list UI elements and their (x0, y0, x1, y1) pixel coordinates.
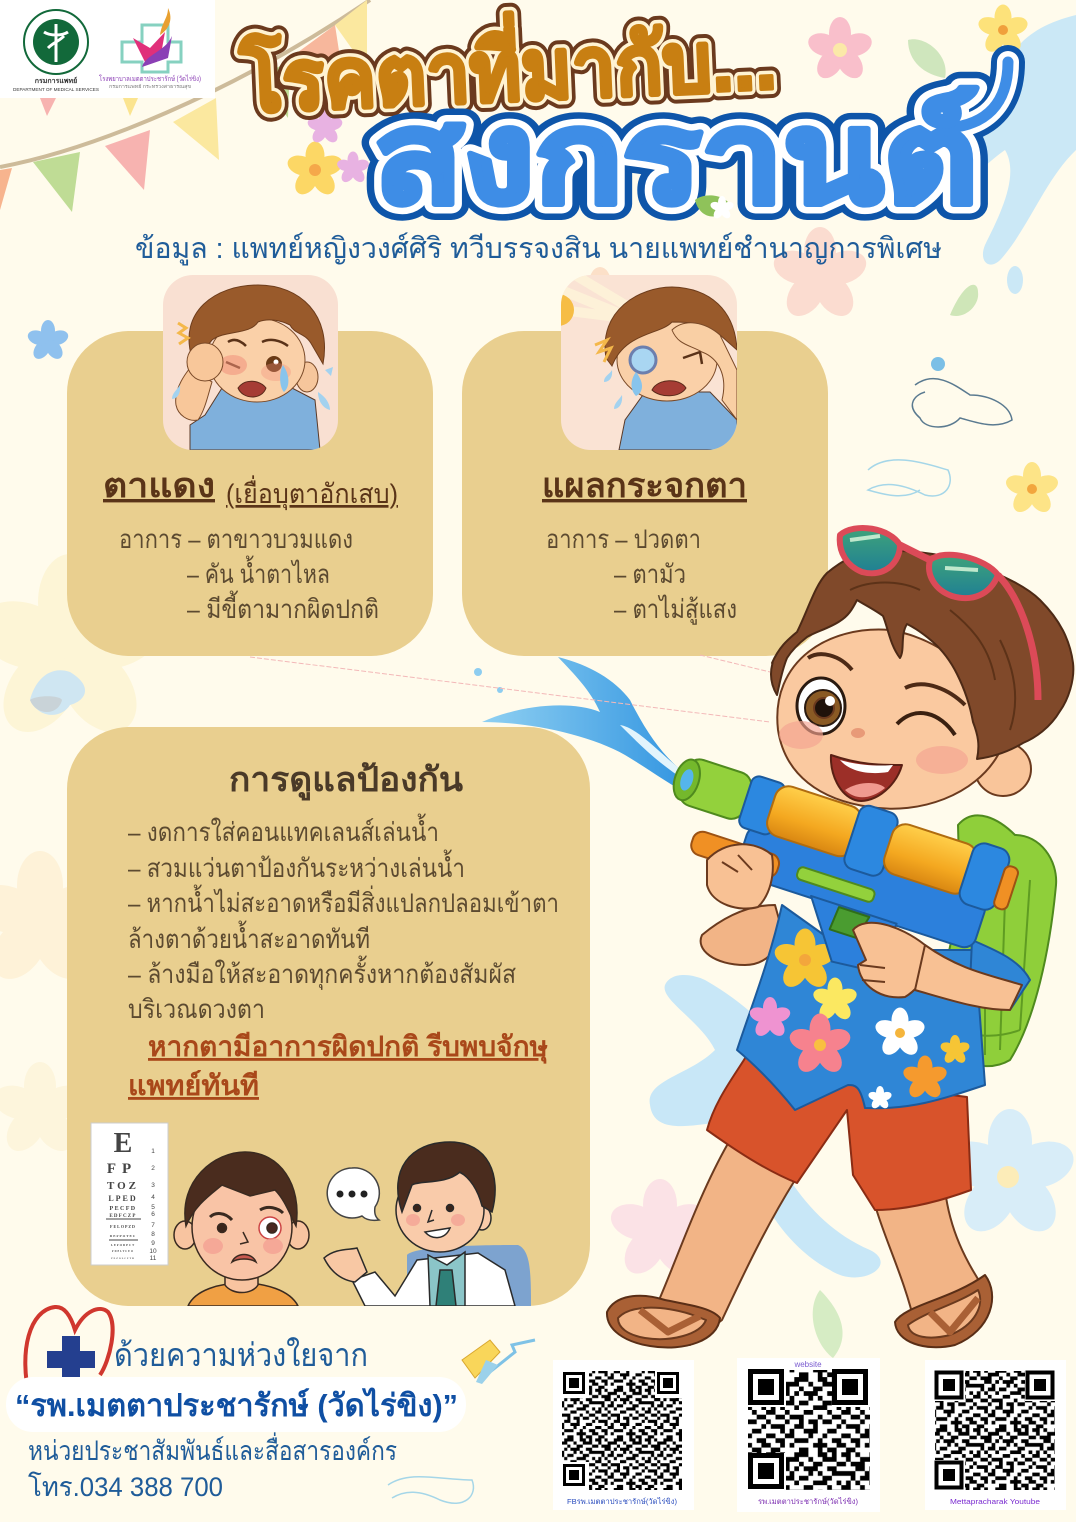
footer: hospital name (6, 1377, 466, 1432)
QR code: website (737, 1358, 880, 1512)
illustration: eye chart: TOZ (107, 1180, 139, 1192)
QR code: youtube (925, 1360, 1066, 1510)
illustration: eye chart: FELOPZD (110, 1224, 136, 1229)
advice list: – หากน้ำไม่สะอาดหรือมีสิ่งแปลกปลอมเข้าตา (128, 884, 559, 918)
title line 1: โรคตาที่มากับ... (237, 0, 778, 130)
QR code: website: รพ.เมตตาประชารักษ์(วัดไร่ขิง) (758, 1497, 858, 1506)
footer: unit name: หน่วยประชาสัมพันธ์และสื่อสารองค์กร (28, 1432, 397, 1466)
winking eye (897, 713, 955, 735)
symptom list: – ตาไม่สู้แสง (614, 594, 737, 625)
panel: care and prevention (67, 727, 590, 1306)
symptom list (546, 524, 737, 625)
illustration: eye chart: LEFODPCT (111, 1243, 135, 1247)
open eye (797, 678, 845, 734)
QR code: facebook: FBรพ.เมตตาประชารักษ์(วัดไร่ขิง) (567, 1497, 678, 1506)
illustration: eye chart: 6 (151, 1211, 155, 1218)
illustration: eye chart: 4 (151, 1194, 155, 1201)
illustration: eye chart: FDPLTCEO (112, 1250, 134, 1253)
illustration: eye chart (91, 1123, 168, 1265)
backpack (900, 815, 1056, 1066)
decoration: water wave doodles (388, 357, 1012, 1503)
title line 1: โรคตาที่มากับ... (237, 0, 778, 130)
illustration: eye chart: 7 (151, 1222, 155, 1229)
illustration: eye chart: 3 (151, 1182, 155, 1189)
advice list: ล้างตาด้วยน้ำสะอาดทันที (128, 920, 370, 954)
logo: hospital: โรงพยาบาลเมตตาประชารักษ์ (วัดไร่ขิง) (99, 74, 201, 83)
character: boy with water gun (607, 528, 1073, 1348)
panel: corneal ulcer (462, 275, 828, 656)
advice list: – สวมแว่นตาป้องกันระหว่างเล่นน้ำ (128, 849, 465, 883)
footer: phone: โทร.034 388 700 (28, 1472, 223, 1502)
footer: hospital logo (25, 1307, 113, 1400)
title line 2: สงกรานต์ (374, 87, 978, 230)
illustration: eye chart: 9 (151, 1240, 155, 1247)
advice list: บริเวณดวงตา (128, 994, 265, 1024)
illustration: eye chart: FP (107, 1161, 137, 1177)
illustration: eye chart: 11 (150, 1255, 157, 1262)
symptom list: – คัน น้ำตาไหล (187, 555, 330, 589)
footer: concern text: ด้วยความห่วงใยจาก (114, 1337, 368, 1373)
speech bubble (327, 1168, 379, 1220)
faint red laser lines (250, 655, 770, 722)
arms back (701, 905, 782, 965)
title line 2: สงกรานต์ (374, 87, 978, 230)
panel: conjunctivitis (67, 275, 433, 656)
footer: hospital name: “รพ.เมตตาประชารักษ์ (วัดไร่ขิง)” (15, 1387, 458, 1423)
decoration: leaf on title (695, 195, 735, 220)
logos block (0, 0, 215, 98)
legs (650, 1140, 985, 1345)
symptom list: อาการ – ตาขาวบวมแดง (119, 524, 353, 554)
title line 1: โรคตาที่มากับ... (237, 0, 778, 130)
background: water splash behind boy (650, 975, 881, 1277)
illustration: eye chart: E (114, 1128, 132, 1159)
subtitle: data source: ข้อมูล : แพทย์หญิงวงศ์ศิริ ทวีบรรจงสิน นายแพทย์ชำนาญการพิเศษ (135, 232, 942, 266)
sub heading: (เยื่อบุตาอักเสบ) (226, 475, 398, 511)
logo: department of medical services (13, 10, 99, 92)
illustration: eye chart: PECFD (110, 1206, 136, 1212)
hands (707, 844, 1022, 1010)
symptom list: อาการ – ปวดตา (546, 524, 701, 554)
patient (174, 1152, 309, 1306)
illustration: patient and doctor (174, 1142, 531, 1306)
symptom list (119, 524, 379, 624)
background: pale flowers (0, 227, 1076, 1281)
head (771, 528, 1073, 809)
warning text (128, 1031, 548, 1101)
QR code: youtube: Mettapracharak Youtube (950, 1497, 1040, 1506)
illustration: eye chart: EDFCZP (109, 1214, 137, 1219)
heading: ตาแดง (103, 467, 215, 505)
shirt (737, 905, 1030, 1110)
footer: mini water gun (462, 1340, 535, 1384)
advice list: – ล้างมือให้สะอาดทุกครั้งหากต้องสัมผัส (128, 955, 516, 990)
decoration: bunting (0, 0, 370, 212)
title line 2: สงกรานต์ (374, 87, 978, 230)
symptom list: – มีขี้ตามากผิดปกติ (187, 590, 379, 624)
sunglasses (840, 528, 1038, 700)
illustration: eye chart: 2 (151, 1165, 155, 1172)
water gun (636, 746, 1024, 1008)
illustration: eye chart: PEZOLCFTD (111, 1257, 135, 1260)
background: water splash top right (940, 15, 1076, 294)
logo: department of medical services: DEPARTMENT OF MEDICAL SERVICES (13, 87, 99, 92)
advice list: – งดการใส่คอนแทคเลนส์เล่นน้ำ (128, 813, 439, 847)
illustration: eye chart: 10 (149, 1248, 157, 1255)
decoration: water bowl splash (30, 670, 85, 715)
advice list (128, 813, 559, 1024)
illustration: eye chart: DEFPOTEC (110, 1234, 136, 1238)
logo: hospital: กรมการแพทย์ กระทรวงสาธารณสุข (109, 83, 191, 90)
heading: แผลกระจกตา (542, 467, 747, 505)
warning text: หากตามีอาการผิดปกติ รีบพบจักษุ (148, 1031, 548, 1064)
illustration: eye chart: LPED (108, 1194, 138, 1203)
illustration: boy with light-sensitive eye (542, 275, 737, 450)
illustration: boy rubbing red eye (163, 275, 338, 450)
mouth (831, 755, 902, 801)
illustration: eye chart: 1 (151, 1148, 155, 1155)
QR code: facebook (553, 1360, 694, 1510)
shorts (707, 1055, 971, 1210)
logo: hospital (99, 8, 201, 90)
symptom list: – ตามัว (614, 559, 686, 589)
illustration: eye chart: 8 (151, 1231, 155, 1238)
water spray (474, 657, 695, 795)
sandals and feet (607, 1275, 992, 1348)
heading: การดูแลป้องกัน (229, 761, 463, 801)
illustration: eye chart: 5 (151, 1204, 155, 1211)
doctor (324, 1142, 531, 1306)
QR code: website: website (793, 1360, 822, 1369)
warning text: แพทย์ทันที (128, 1070, 259, 1101)
logo: department of medical services: กรมการแพทย์ (35, 76, 77, 85)
